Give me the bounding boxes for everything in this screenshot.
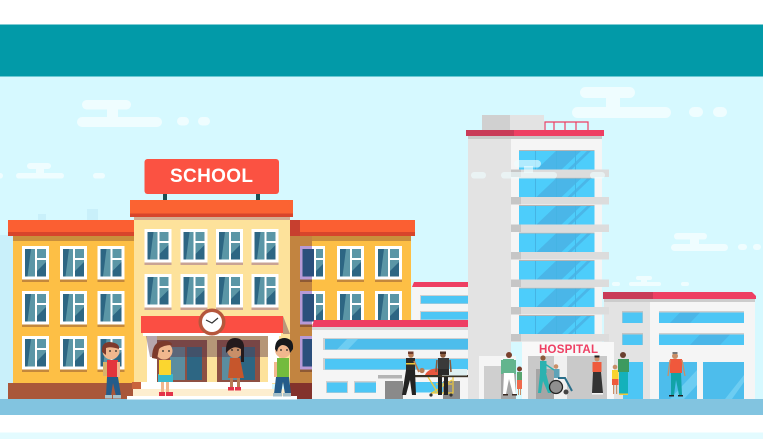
child in yellow	[612, 365, 618, 394]
child: girl in yellow shirt	[152, 341, 173, 396]
hospital tower	[466, 115, 609, 399]
clock	[198, 308, 226, 336]
man in orange shirt	[668, 352, 685, 396]
distant skyline	[0, 209, 98, 400]
hospital entrance	[479, 342, 614, 399]
teal header band	[0, 24, 763, 76]
hospital ward building	[312, 320, 468, 399]
school building	[8, 159, 415, 400]
hospital sign: HOSPITAL	[539, 344, 598, 356]
man in green with child	[501, 352, 522, 396]
paramedic behind stretcher	[436, 352, 451, 395]
woman in green and teal	[618, 352, 629, 395]
paramedic pushing stretcher	[402, 352, 419, 395]
child: boy in green shirt	[273, 338, 293, 396]
school sign: SCHOOL	[170, 166, 253, 187]
hospital building	[312, 115, 756, 399]
school left wing	[8, 220, 135, 399]
hospital right wing	[603, 292, 756, 399]
clouds	[0, 87, 761, 286]
sky panel	[0, 76, 763, 400]
stretcher with patient	[413, 368, 468, 397]
school right wing	[290, 220, 415, 399]
tower cloud overlay	[471, 160, 605, 178]
child: girl in brown dress	[226, 338, 244, 390]
school entrance	[127, 316, 297, 400]
bottom pale strip	[0, 432, 763, 439]
hospital back wing	[412, 282, 468, 321]
ground strip	[0, 399, 763, 415]
nurse pushing wheelchair	[538, 355, 572, 394]
school sign	[144, 159, 279, 200]
woman in black skirt	[592, 356, 603, 394]
child: boy in red shirt	[102, 342, 121, 398]
school centre block	[130, 200, 293, 384]
